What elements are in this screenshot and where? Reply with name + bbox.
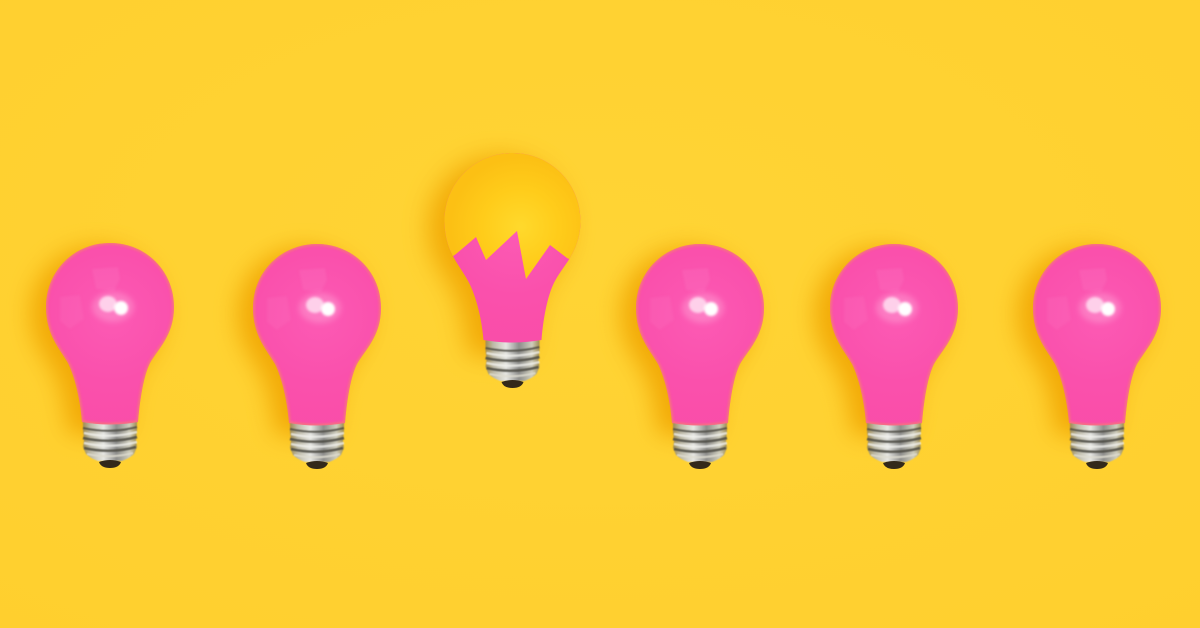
painted yellow bulb (444, 153, 580, 388)
pink bulb 4 (636, 244, 764, 469)
yellow torn top (444, 153, 580, 279)
pink bulb 2 (253, 244, 381, 469)
pink bulb 1 (46, 243, 174, 468)
bulb shadows (30, 157, 1151, 436)
pink lower part (444, 153, 580, 342)
pink bulb 6 (1033, 244, 1161, 469)
pink bulb 5 (830, 244, 958, 469)
